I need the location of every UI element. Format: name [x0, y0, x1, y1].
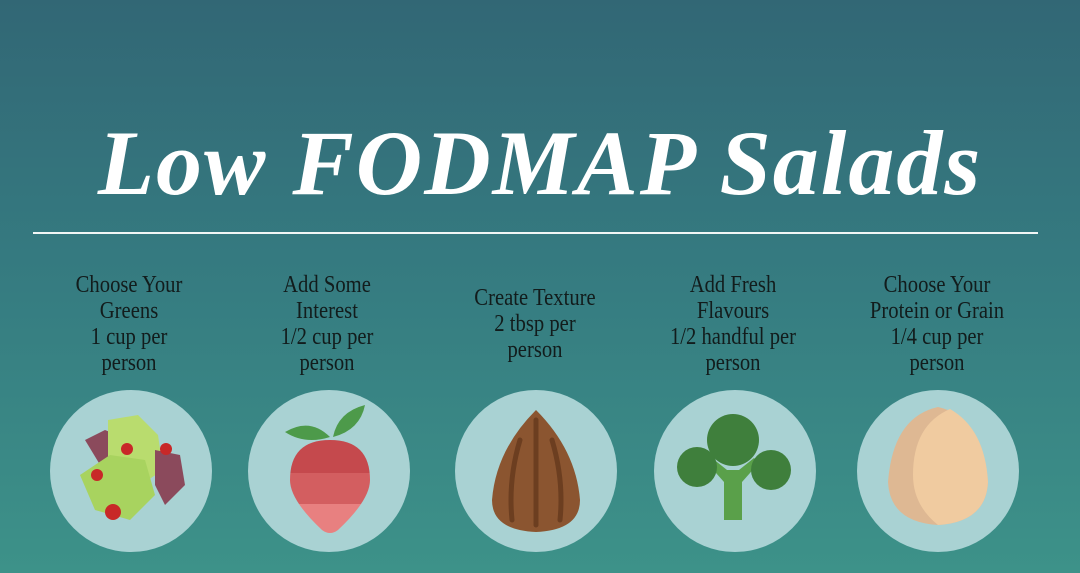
caption: protein: [870, 272, 1004, 376]
caption: greens: person: [101, 350, 157, 376]
caption: interest: [281, 272, 374, 376]
title: Low FODMAP Salads: [98, 112, 982, 214]
caption: greens: 1 cup per: [91, 324, 167, 350]
icon: egg: [857, 390, 1019, 552]
caption: flavours: Add Fresh: [690, 272, 776, 298]
caption: protein: person: [909, 350, 965, 376]
caption: interest: person: [299, 350, 355, 376]
caption: greens: [76, 272, 182, 376]
caption: greens: Choose Your: [76, 272, 182, 298]
caption: protein: Choose Your: [884, 272, 990, 298]
caption: flavours: [670, 272, 796, 376]
icons: [50, 390, 1019, 552]
caption: flavours: Flavours: [697, 298, 769, 324]
caption: flavours: 1/2 handful per: [670, 324, 796, 350]
caption: protein: Protein or Grain: [870, 298, 1004, 324]
caption: interest: 1/2 cup per: [281, 324, 373, 350]
icon: almond: [455, 390, 617, 552]
caption: interest: Interest: [296, 298, 358, 324]
caption: texture: [474, 285, 596, 363]
caption: interest: Add Some: [283, 272, 371, 298]
icon: broccoli: [654, 390, 816, 552]
caption: texture: Create Texture: [474, 285, 596, 311]
caption: greens: Greens: [100, 298, 158, 324]
caption: protein: 1/4 cup per: [891, 324, 983, 350]
caption: texture: person: [507, 337, 563, 363]
caption: flavours: person: [705, 350, 761, 376]
caption: texture: 2 tbsp per: [494, 311, 576, 337]
icon: salad greens: [50, 390, 212, 552]
icon: radish: [248, 390, 410, 552]
